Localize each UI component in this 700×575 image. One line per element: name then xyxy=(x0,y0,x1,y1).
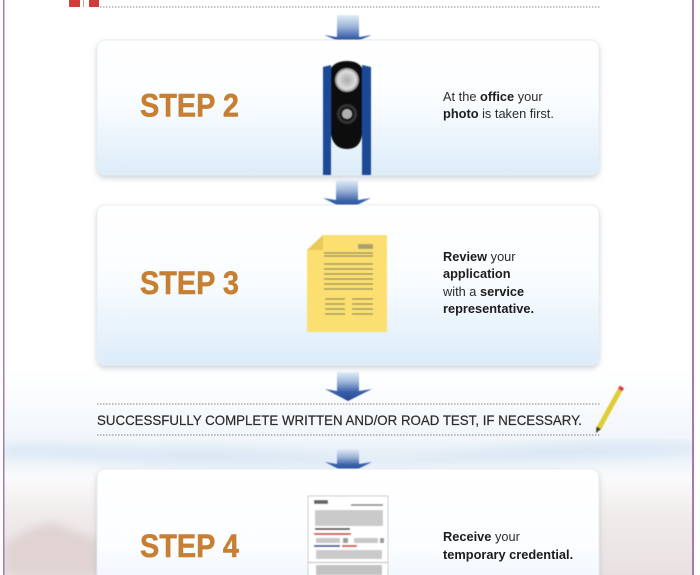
icon: pencil xyxy=(596,387,622,433)
text: step 4 description: temporary credential. xyxy=(443,547,573,562)
panel: step 2 xyxy=(97,40,599,175)
icon: temporary credential document xyxy=(308,496,388,575)
panel: step 4 xyxy=(97,469,599,575)
arrow: to step 3 xyxy=(323,180,371,210)
heading: step 3: STEP 3 xyxy=(140,265,239,301)
arrow: to written test xyxy=(325,372,372,401)
heading: step 4: STEP 4 xyxy=(140,528,239,564)
icon: camera xyxy=(323,61,371,175)
arrow: to step 4 xyxy=(325,449,372,474)
top dotted divider xyxy=(100,6,600,8)
callout: written and road test: SUCCESSFULLY COMPLETE WRITTEN AND/OR ROAD TEST, IF NECESSARY. xyxy=(97,412,582,428)
text: step 3 description: application xyxy=(443,266,511,281)
text: step 3 description xyxy=(442,249,534,316)
text: step 2 description: At the office your xyxy=(443,89,543,104)
text: step 3 description: with a service xyxy=(442,284,524,299)
icon: yellow document xyxy=(307,235,387,332)
text: step 4 description xyxy=(443,529,573,562)
text: step 2 description line 2: photo is taken first. xyxy=(443,106,554,121)
text: step 4 description: Receive your xyxy=(443,529,521,544)
text: step 3 description: representative. xyxy=(443,301,534,316)
panel: step 3 xyxy=(97,205,599,365)
text: step 3 description: Review your xyxy=(443,249,516,264)
icon: red flag fragment xyxy=(69,0,99,7)
arrow: to step 2 xyxy=(324,15,372,45)
background: misty landscape xyxy=(4,370,693,575)
heading: step 2: STEP 2 xyxy=(140,88,239,124)
